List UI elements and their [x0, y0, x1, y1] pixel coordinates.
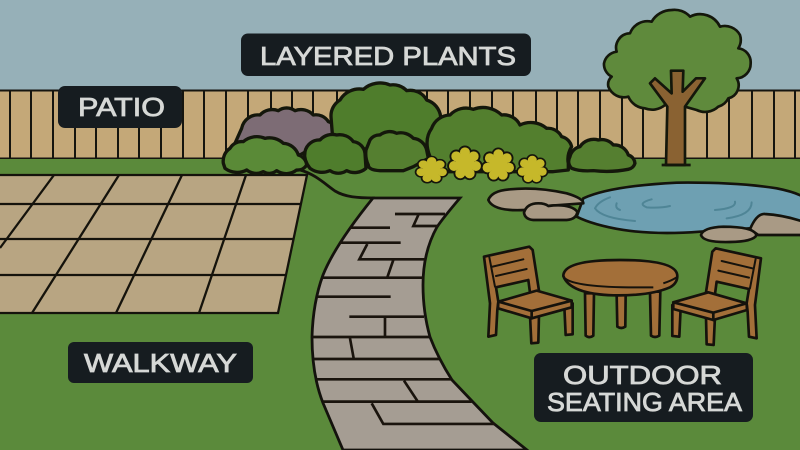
yellow flowers [416, 147, 547, 182]
table and chairs [484, 247, 761, 345]
label: patio [58, 86, 182, 128]
front shrub left [223, 137, 307, 174]
label: outdoor seating area [534, 353, 753, 422]
rock [524, 203, 577, 220]
table [563, 260, 677, 337]
label: layered plants [241, 34, 531, 76]
rock [488, 189, 583, 210]
tree [604, 10, 751, 165]
background sky [0, 0, 800, 92]
purple shrub [235, 108, 338, 155]
tall back shrub [331, 83, 442, 153]
water [577, 183, 800, 235]
layered plants [223, 83, 635, 182]
label: outdoor seating area: OUTDOOR [563, 360, 722, 390]
rock [701, 227, 757, 242]
front shrub center [366, 132, 428, 171]
label: layered plants: LAYERED PLANTS [260, 41, 516, 71]
lawn [0, 159, 800, 450]
lawn edge curve [300, 170, 375, 198]
label: walkway [68, 342, 253, 383]
pond with rocks [488, 183, 800, 242]
far right shrub [569, 139, 635, 171]
right chair [672, 248, 761, 345]
ripples [595, 197, 752, 221]
crown [604, 10, 751, 112]
walkway [312, 198, 527, 450]
wooden fence [0, 90, 800, 159]
label: outdoor seating area: SEATING AREA [547, 387, 743, 417]
wide right shrub [427, 107, 572, 172]
rock [750, 214, 800, 235]
trunk [650, 71, 705, 165]
label: walkway: WALKWAY [84, 348, 237, 378]
front shrub middle [305, 134, 366, 173]
left chair [484, 247, 573, 343]
patio [0, 175, 307, 313]
label: patio: PATIO [78, 92, 165, 122]
